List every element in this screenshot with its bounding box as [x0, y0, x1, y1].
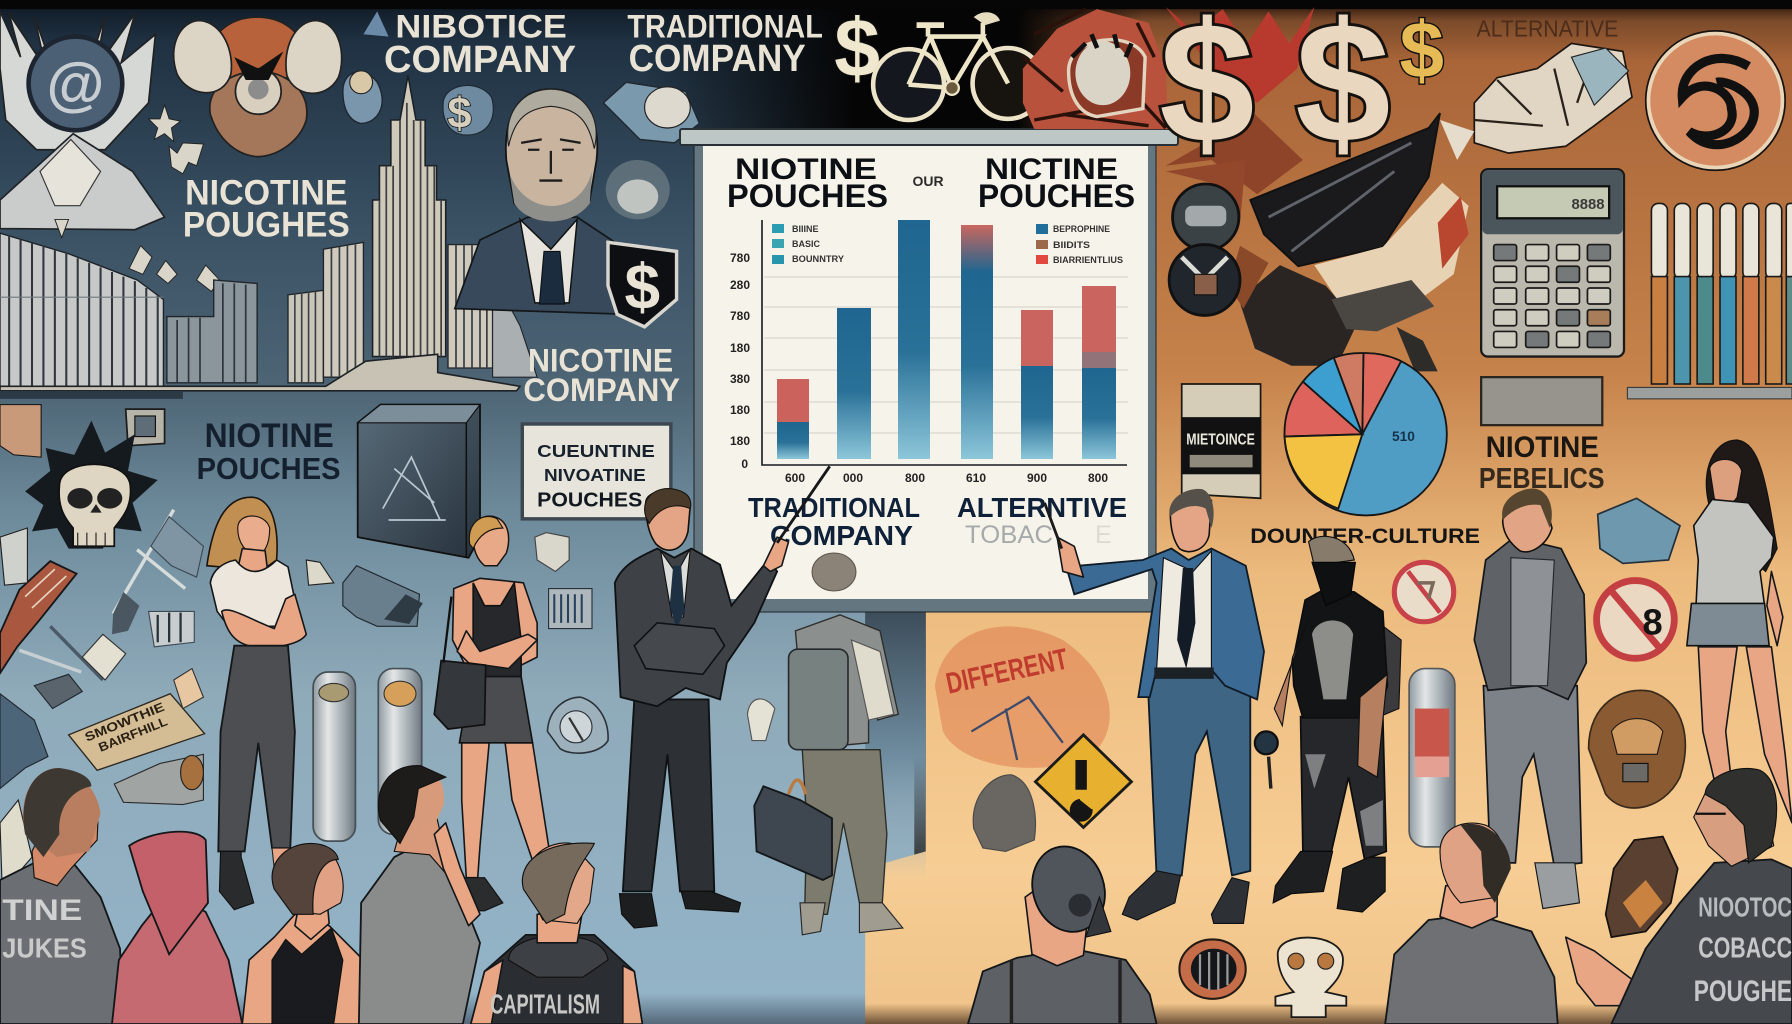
- blue bag: [1598, 498, 1680, 563]
- icon: no sign small: [1394, 562, 1454, 622]
- chart caption left: TRADITIONAL: [748, 492, 920, 523]
- text: Nicotine Pouches (dark): [197, 417, 341, 486]
- chart title connector: OUR: [912, 173, 944, 189]
- chart title right: [978, 153, 1135, 214]
- icon: paint brush: [0, 561, 77, 673]
- person: audience pink hoodie: [112, 832, 242, 1024]
- canisters: [313, 669, 422, 841]
- background: top edge: [0, 0, 1792, 9]
- legend left: BIIINE: [792, 224, 819, 234]
- y axis labels: [730, 251, 750, 471]
- sign: pouches: POUCHES: [537, 488, 642, 511]
- icon: no sign large: [1597, 581, 1674, 658]
- person: audience back view: [1385, 823, 1558, 1024]
- y axis labels: 280: [730, 278, 750, 292]
- chart board: [680, 129, 1178, 612]
- chart title left: NIOTINE: [735, 153, 877, 186]
- pie chart: [1284, 353, 1447, 515]
- y axis labels: 780: [730, 309, 750, 323]
- chart caption right: [957, 492, 1127, 549]
- x axis labels: 600: [785, 471, 805, 485]
- chart caption right: E: [1095, 521, 1112, 549]
- person: right presenter: [1045, 489, 1264, 923]
- y axis labels: 0: [741, 457, 748, 471]
- text: Nibotice Company: COMPANY: [384, 38, 576, 80]
- background: black top band: [640, 0, 1143, 135]
- person: woman with crossed arms: [207, 497, 306, 910]
- icon: oval badge bottom: [1179, 939, 1246, 999]
- icon: big dollar signs: $: [1399, 6, 1444, 95]
- person: left presenter: [615, 466, 830, 928]
- grey wig: [973, 775, 1035, 851]
- y axis labels: 780: [730, 251, 750, 265]
- round gadgets: [1169, 184, 1240, 315]
- cigarette pack: [1182, 384, 1261, 498]
- calculator: 8888: [1572, 197, 1605, 213]
- person: audience man left: TINE: [2, 894, 82, 927]
- legend right: BEPROPHINE: [1053, 224, 1110, 234]
- x axis labels: [785, 471, 1108, 485]
- bar 5: [1021, 310, 1053, 459]
- portrait: executive: [455, 89, 626, 314]
- person: audience woman in tank: [242, 843, 368, 1024]
- text: Nicotine Pouches (light): NICOTINE: [185, 173, 347, 213]
- scattered scraps centre: [174, 533, 608, 753]
- icon: blue stones: [343, 11, 389, 123]
- icon: fist badge: [1589, 690, 1685, 808]
- x axis labels: 000: [843, 471, 863, 485]
- text: Nicotine Company (light): COMPANY: [523, 372, 680, 408]
- text: Niotine Pebelics: [1479, 431, 1605, 495]
- white pile: [1474, 43, 1632, 153]
- sign: pouches: [522, 424, 671, 519]
- legend right: [1036, 224, 1123, 265]
- bar 1: [777, 379, 809, 459]
- canister right: [1409, 669, 1455, 847]
- person: audience capitalism: CAPITALISM: [490, 989, 600, 1020]
- person: audience capitalism: [471, 843, 642, 1024]
- note paper: SMOWTHIE: [83, 700, 166, 744]
- icon: shield with dollar: $: [624, 251, 660, 323]
- sign: pouches: CUEUNTINE: [537, 441, 655, 461]
- red shards top: [1166, 7, 1314, 194]
- text: counter culture: DOUNTER-CULTURE: [1250, 523, 1480, 548]
- tools and scraps left: [0, 510, 203, 891]
- black cape: [1250, 113, 1474, 266]
- hairy mascot: [1566, 837, 1678, 1006]
- x axis labels: 610: [966, 471, 986, 485]
- text: Nicotine Company (light): [523, 342, 680, 408]
- icon: prohibition circle: [1646, 31, 1785, 170]
- shelf: [1627, 387, 1792, 399]
- background: counter-culture (orange) side: [865, 0, 1792, 1024]
- icon: wreath emblem: [0, 11, 165, 230]
- text: Nicotine Pouches (dark): POUCHES: [197, 451, 341, 486]
- person: audience man left: JUKES: [2, 933, 87, 964]
- icon: warning diamond: [1035, 735, 1131, 827]
- person: audience with cap: [968, 837, 1157, 1024]
- text: Niotine Pebelics: PEBELICS: [1479, 463, 1605, 495]
- icon: dollar tag: $: [447, 90, 471, 138]
- ledge: [0, 391, 183, 399]
- text: Alternative top: ALTERNATIVE: [1477, 16, 1618, 42]
- note paper: [69, 694, 205, 805]
- y axis labels: 380: [730, 372, 750, 386]
- text: Nicotine Company (light): NICOTINE: [528, 342, 673, 378]
- plaza base: [0, 354, 520, 391]
- person: audience man left: [0, 768, 123, 1024]
- graffiti: different: [935, 626, 1110, 768]
- legend left: BOUNNTRY: [792, 254, 844, 264]
- text: Nicotine Pouches (light): [183, 173, 350, 245]
- metal grille: [1481, 377, 1602, 425]
- product box: [358, 405, 480, 558]
- legend right: BIIDITS: [1053, 240, 1090, 250]
- cigarette pack: MIETOINCE: [1186, 432, 1255, 449]
- legend right: BIARRIENTLIUS: [1053, 255, 1123, 265]
- legend left: BASIC: [792, 239, 821, 249]
- icon: cream dollar: $: [834, 4, 880, 95]
- person: masked punk: [1255, 536, 1401, 912]
- bar chart: [730, 220, 1128, 485]
- board frame: [694, 140, 1156, 612]
- y axis labels: 180: [730, 403, 750, 417]
- board surface: [703, 145, 1148, 599]
- person: woman right: [1687, 440, 1792, 823]
- icon: no sign large: 8: [1642, 601, 1663, 642]
- bar 3: [898, 220, 930, 459]
- background: blue strip under board: [865, 606, 926, 880]
- icon: wreath emblem: @: [46, 50, 104, 117]
- text: Nicotine Pouches (dark): NIOTINE: [205, 417, 334, 455]
- person: man in hoodie: [1474, 489, 1586, 909]
- pie chart: 510: [1392, 429, 1415, 444]
- smudge on board: [812, 553, 856, 591]
- icon: star and small scraps: [55, 105, 219, 291]
- text: Traditional Company: TRADITIONAL: [627, 9, 823, 45]
- building: long fence hall: [0, 233, 163, 386]
- text: Traditional Company: [627, 9, 823, 79]
- board top rail: [680, 129, 1178, 145]
- test tubes: [1651, 203, 1792, 384]
- chart caption left: COMPANY: [770, 520, 913, 551]
- text: Nibotice Company: NIBOTICE: [395, 9, 567, 45]
- text: Traditional Company: COMPANY: [629, 37, 806, 79]
- text: Niotine Pebelics: NIOTINE: [1486, 431, 1599, 464]
- background: traditional (blue) side: [0, 0, 914, 1024]
- icon: silver pieces: [603, 82, 699, 219]
- red burst with egg: [1023, 9, 1168, 129]
- icon: small skull bottom: [1275, 938, 1346, 1017]
- bar 6: [1082, 286, 1116, 459]
- chart title left: [727, 153, 888, 214]
- chart title right: POUCHES: [978, 178, 1135, 214]
- x axis labels: 900: [1027, 471, 1047, 485]
- x axis labels: 800: [1088, 471, 1108, 485]
- icon: notes upper left: [0, 405, 165, 457]
- bar 4: [961, 225, 993, 459]
- bar 2: [837, 308, 871, 459]
- x axis labels: 800: [905, 471, 925, 485]
- y axis labels: 180: [730, 434, 750, 448]
- icon: flower and rocks cluster: [174, 17, 342, 157]
- chart caption left: [748, 492, 920, 551]
- icon: shield with dollar: [608, 242, 677, 327]
- person: audience man in grey: [359, 766, 480, 1024]
- person: woman with bag: [434, 516, 553, 911]
- person: man with glasses: [1611, 768, 1792, 1024]
- debris pile: [1166, 160, 1469, 371]
- chart caption right: ALTERNTIVE: [957, 492, 1127, 523]
- text: Nicotine Pouches (light): POUGHES: [183, 205, 350, 245]
- text: Nibotice Company: [384, 9, 576, 80]
- chart title right: NICTINE: [985, 153, 1118, 186]
- chart title left: POUCHES: [727, 178, 888, 214]
- calculator: [1481, 169, 1624, 357]
- graffiti: different: DIFFERENT: [943, 643, 1071, 701]
- legend left: [772, 224, 844, 264]
- icon: skull with spikes: [25, 421, 158, 549]
- icon: bicycle: [873, 12, 1043, 120]
- icon: dollar tag: [443, 85, 493, 138]
- building: skyline and tower: [167, 75, 537, 383]
- y axis labels: 180: [730, 341, 750, 355]
- note paper: BAIRFHILL: [96, 714, 170, 755]
- person: figure with backpack: [747, 615, 903, 935]
- icon: big dollar signs: [1159, 0, 1444, 179]
- chart caption right: TOBAC: [965, 521, 1053, 549]
- sign: pouches: NIVOATINE: [544, 465, 646, 485]
